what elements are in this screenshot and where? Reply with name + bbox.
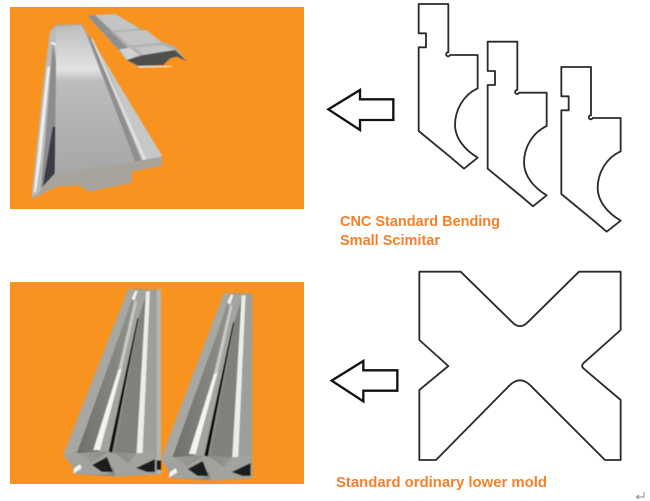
- profile 3: [561, 67, 621, 232]
- profile 1: [419, 4, 478, 169]
- arrow: bottom left-pointing: [332, 361, 397, 401]
- panel: lower mold photo: [10, 282, 304, 484]
- diagrams: three scimitar profiles: [419, 4, 621, 232]
- heading: Standard ordinary lower mold: Standard ordinary lower mold: [336, 474, 547, 491]
- photo: lower mold pair right: [161, 293, 252, 480]
- icon: return mark: [636, 492, 644, 499]
- panel: scimitar photo: [10, 7, 304, 209]
- heading: CNC Standard Bending Small Scimitar: Small Scimitar: [340, 232, 440, 249]
- diagram: X-shaped lower mold profile: [419, 272, 621, 460]
- heading: CNC Standard Bending Small Scimitar: [340, 213, 500, 249]
- photo: small scimitar blades: [88, 14, 187, 68]
- photo: lower mold pair left: [63, 289, 161, 476]
- photo: large scimitar blade: [32, 24, 162, 198]
- arrow: top left-pointing: [328, 90, 393, 130]
- profile 2: [488, 42, 547, 206]
- heading: CNC Standard Bending Small Scimitar: CNC Standard Bending: [340, 213, 500, 230]
